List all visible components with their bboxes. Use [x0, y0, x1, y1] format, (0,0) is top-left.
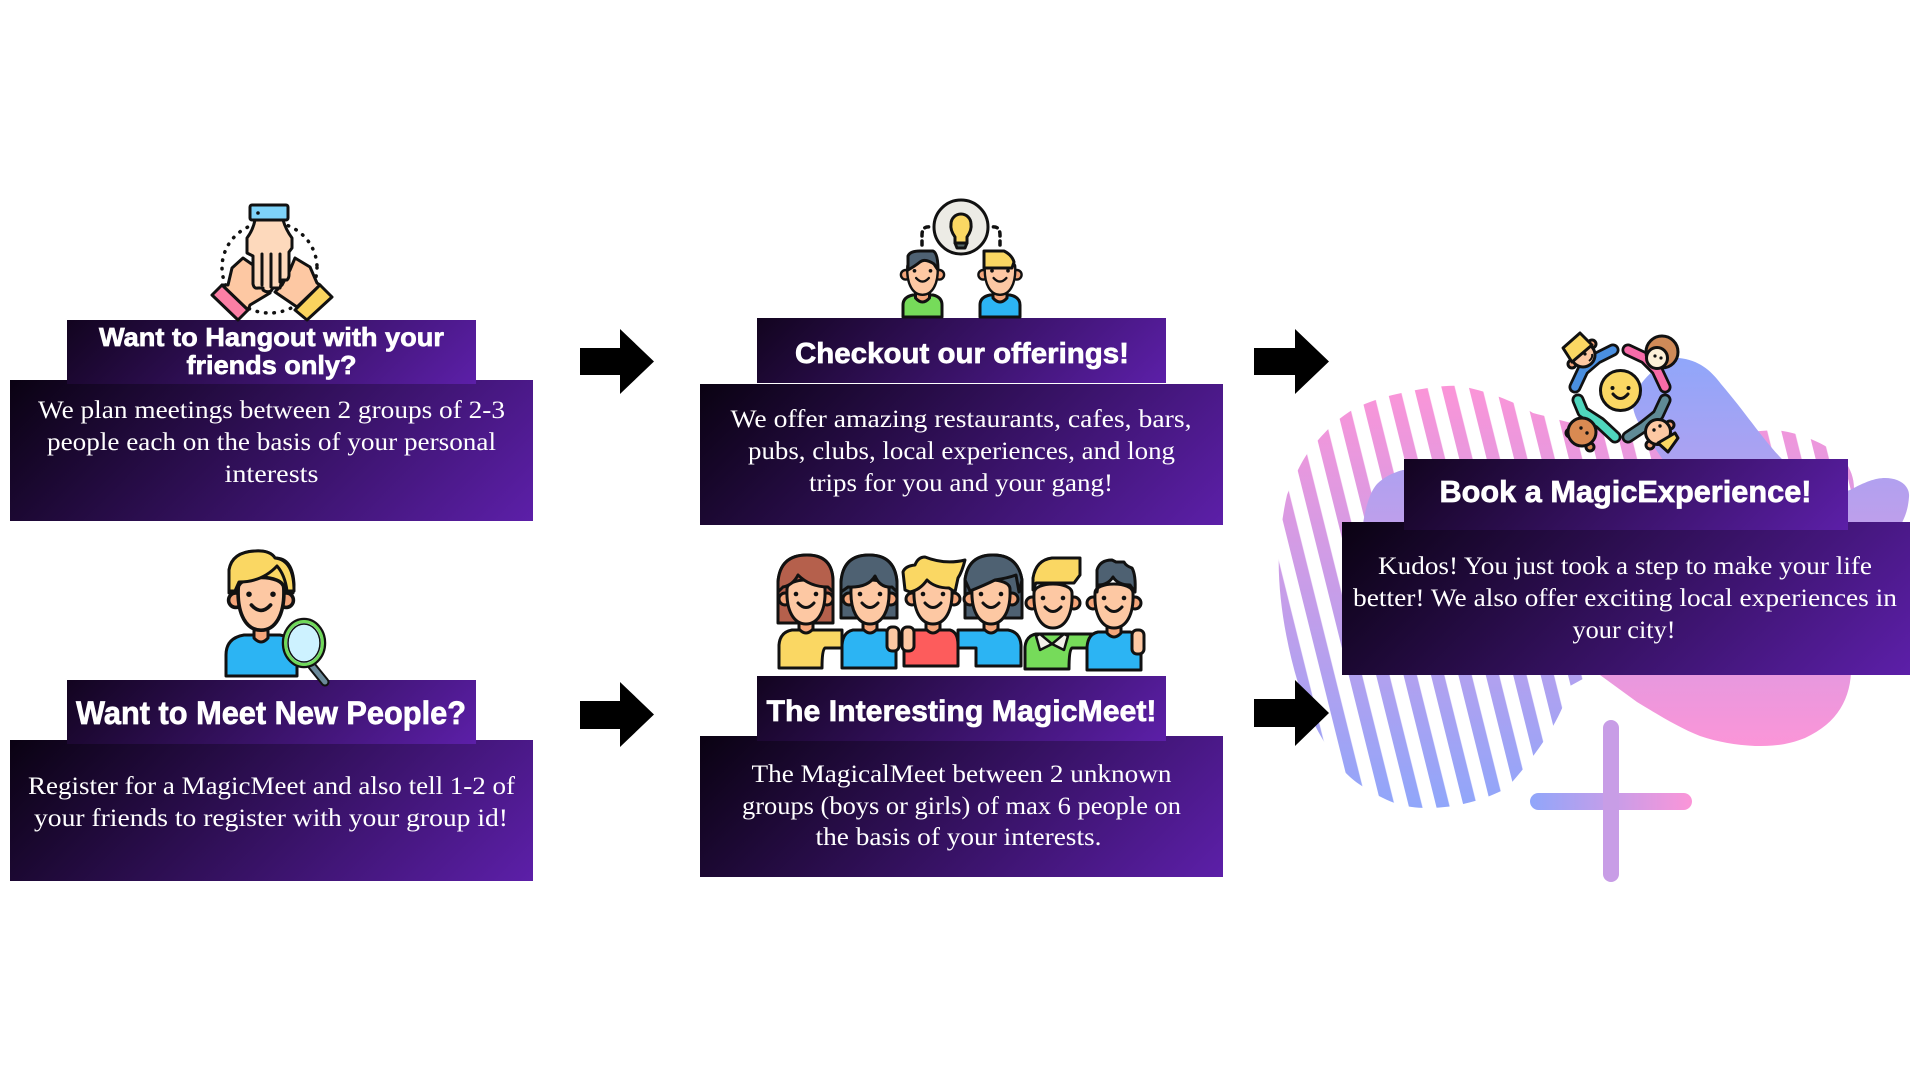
- panel header bar: [67, 680, 476, 744]
- panel: book a magicexperience: [1342, 459, 1910, 675]
- panel header bar: [757, 318, 1166, 383]
- panel body: [10, 740, 533, 881]
- body text: [1353, 553, 1898, 644]
- body text: Register for a MagicMeet and also tell 1-2 of: [28, 773, 516, 800]
- body text: We offer amazing restaurants, cafes, bars,: [730, 406, 1192, 433]
- panel: want to meet new people: [10, 680, 533, 881]
- panel: the interesting magicmeet: [700, 676, 1223, 877]
- body text: people each on the basis of your personal: [47, 429, 496, 456]
- body text: trips for you and your gang!: [809, 470, 1113, 497]
- decorative striped blob: [1278, 386, 1854, 808]
- icon: person with magnifying glass: [226, 551, 325, 682]
- panel body: [700, 384, 1223, 525]
- body text: [28, 773, 516, 832]
- heading: Want to Hangout with your: [99, 322, 444, 352]
- panel header bar: [67, 320, 476, 384]
- icon: three hands together: [212, 205, 332, 320]
- arrow: offerings to booking: [1254, 329, 1329, 394]
- body text: interests: [224, 461, 318, 488]
- body text: the basis of your interests.: [816, 824, 1102, 851]
- heading: Book a MagicExperience!: [1440, 474, 1812, 509]
- decorative solid blob: [1363, 358, 1909, 746]
- body text: [730, 406, 1192, 497]
- body text: We plan meetings between 2 groups of 2-3: [38, 397, 505, 424]
- heading: Want to Meet New People?: [76, 695, 466, 731]
- panel: want to hangout: [10, 320, 533, 521]
- body text: your city!: [1572, 617, 1676, 644]
- panel: checkout our offerings: [700, 318, 1223, 525]
- panel body: [10, 380, 533, 521]
- body text: groups (boys or girls) of max 6 people on: [742, 793, 1182, 820]
- panel body: [1342, 522, 1910, 675]
- body text: Kudos! You just took a step to make your life: [1378, 553, 1872, 580]
- heading: friends only?: [186, 350, 356, 380]
- body text: better! We also offer exciting local experiences in: [1353, 585, 1898, 612]
- body text: The MagicalMeet between 2 unknown: [752, 761, 1172, 788]
- arrow: magicmeet to booking: [1254, 680, 1329, 746]
- body text: your friends to register with your group id!: [34, 805, 508, 832]
- icon: two people sharing an idea: [901, 200, 1022, 317]
- arrow: hangout to offerings: [580, 329, 654, 394]
- heading: Checkout our offerings!: [795, 338, 1129, 370]
- panel body: [700, 736, 1223, 877]
- icon: four friends around a smiley: [1563, 333, 1678, 452]
- body text: [38, 397, 505, 488]
- body text: pubs, clubs, local experiences, and long: [748, 438, 1176, 465]
- panel header bar: [757, 676, 1166, 741]
- heading: [99, 322, 444, 380]
- decorative plus sign: [1530, 720, 1692, 882]
- body text: [742, 761, 1182, 851]
- icon: group of six friends: [778, 555, 1144, 670]
- arrow: meet new people to magicmeet: [580, 682, 654, 747]
- panel header bar: [1404, 459, 1848, 530]
- heading: The Interesting MagicMeet!: [766, 695, 1156, 728]
